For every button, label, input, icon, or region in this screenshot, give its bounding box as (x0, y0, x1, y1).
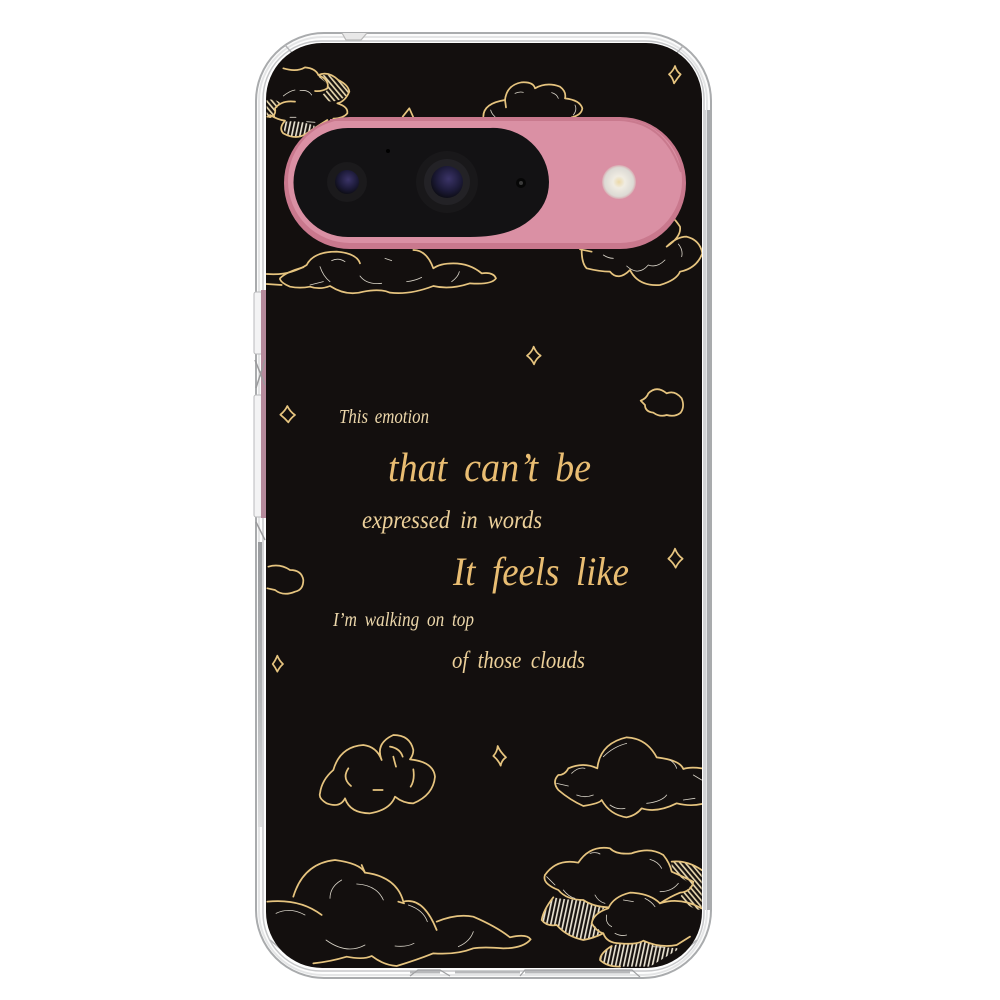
camera bar (284, 117, 686, 249)
star: left of text (280, 406, 295, 422)
text: line 3: expressed in words (362, 507, 542, 534)
phone case illustration (254, 32, 712, 979)
cloud: top left hatched (267, 67, 349, 137)
black back panel (266, 43, 702, 968)
clear case (254, 33, 711, 978)
text: line 4: It feels like (452, 549, 629, 594)
clouds at bottom (267, 735, 702, 967)
cloud: small left (267, 566, 303, 594)
cloud: under camera right (580, 220, 702, 285)
star: right of text (668, 549, 683, 568)
star: top right (669, 66, 681, 83)
text: line 6: of those clouds (452, 648, 585, 674)
star: lower left (273, 656, 283, 672)
star: middle (493, 746, 506, 766)
cloud: under camera left (267, 250, 496, 293)
cloud: bottom left (267, 860, 531, 966)
text: line 2: that can’t be (388, 444, 591, 490)
sensor dot (516, 178, 526, 188)
flash (602, 165, 636, 199)
cloud: middle left (320, 735, 435, 813)
clouds at top (267, 66, 702, 293)
text: line 1: This emotion (339, 406, 429, 428)
lens: main (416, 151, 478, 213)
cloud: middle right (555, 737, 702, 817)
storm clouds: bottom right (542, 848, 702, 967)
black camera window (293, 128, 549, 237)
lyric text block (332, 406, 629, 674)
lens: left (327, 162, 367, 202)
cloud and star artwork (267, 66, 702, 967)
star: above text (527, 347, 541, 364)
cloud tip behind camera (403, 108, 413, 117)
pink housing (284, 117, 686, 249)
cloud: top center (483, 82, 582, 117)
microphone dot (386, 149, 390, 153)
text: line 5: I’m walking on top (332, 609, 474, 631)
cloud: small right (641, 389, 683, 416)
